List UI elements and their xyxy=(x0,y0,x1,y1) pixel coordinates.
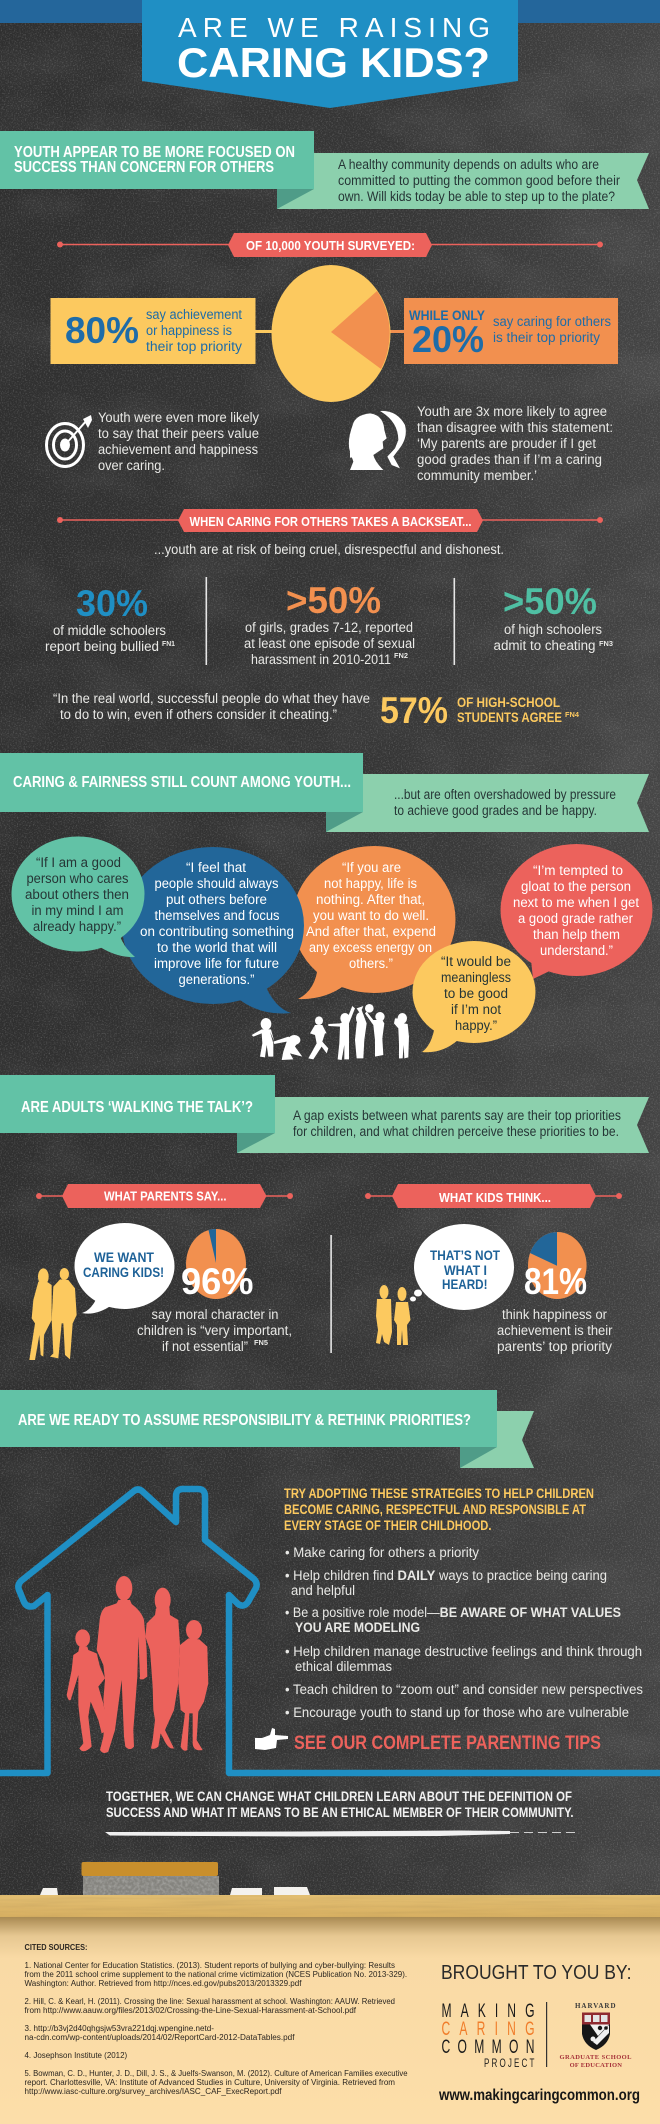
text: moral character: FN5 xyxy=(254,1340,268,1347)
pie chart: 96%: 96% xyxy=(181,1261,254,1302)
icon: parents silhouette xyxy=(29,1268,77,1360)
cited sources: report. Charlottesville, VA: Institute of Advanced Studies in Culture, University of Virginia. Retrieved from xyxy=(24,2077,395,2087)
icon: head silhouettes xyxy=(349,411,406,470)
callout: 80% xyxy=(50,298,256,364)
pie chart: 80 / 20 xyxy=(255,265,406,402)
panel: section 4 banner xyxy=(0,1075,649,1153)
text: strategies heading: BECOME CARING, RESPECTFUL AND RESPONSIBLE AT xyxy=(284,1502,587,1517)
cited sources: from http://www.aauw.org/files/2013/02/Crossing-the-Line-Sexual-Harassment-at-School.pdf xyxy=(24,2005,357,2015)
speech bubble: yellow: meaningless xyxy=(441,970,511,985)
chalk pieces xyxy=(40,1887,310,1895)
speech bubble: orange: any excess energy on xyxy=(309,940,432,955)
call to action: parenting tips: SEE OUR COMPLETE PARENTING TIPS xyxy=(294,1733,601,1754)
quote: real world xyxy=(53,691,370,722)
quote: real world: “In the real world, successful people do what they have xyxy=(53,691,370,706)
section 1 text: committed to putting the common good before their xyxy=(338,173,620,188)
speech bubble: blue: themselves and focus xyxy=(154,908,280,923)
speech bubble: orange: “If you are xyxy=(342,860,401,875)
stat: 57%: STUDENTS AGREE xyxy=(457,709,562,725)
section 3 heading: CARING & FAIRNESS STILL COUNT AMONG YOUTH... xyxy=(13,774,351,791)
section 1 heading xyxy=(14,144,295,176)
bullet list: strategies: • Help children manage destructive feelings and think through xyxy=(285,1644,642,1659)
stat: >50% girls: >50% xyxy=(286,580,381,621)
logo: making caring common: COMMON xyxy=(442,2036,535,2058)
speech bubble: that's not what I heard: HEARD! xyxy=(442,1276,488,1292)
cited sources: Washington: Author. Retrieved from http://nces.ed.gov/pubs2013/2013329.pdf xyxy=(24,1978,302,1988)
section 1 heading: SUCCESS THAN CONCERN FOR OTHERS xyxy=(14,159,274,176)
pill: what parents say: WHAT PARENTS SAY... xyxy=(104,1190,226,1204)
stat: >50% girls: at least one episode of sexual xyxy=(244,636,415,651)
speech bubble: red: gloat to the person xyxy=(521,879,631,894)
callout: 20%: is their top priority xyxy=(493,330,600,345)
speech bubble: blue xyxy=(122,847,304,1013)
panel: section 3 banner xyxy=(0,753,649,832)
bullet list: strategies: • Be a positive role model—BE AWARE OF WHAT VALUES xyxy=(285,1605,621,1620)
speech bubble: blue: generations.” xyxy=(178,972,254,987)
text: moral character: say moral character in xyxy=(152,1307,278,1322)
stat: >50% cheating: FN3 xyxy=(599,641,613,648)
stat: >50% girls: harassment in 2010-2011 xyxy=(251,652,391,667)
speech bubble: teal: person who cares xyxy=(26,871,129,886)
speech bubble: red: a good grade rather xyxy=(518,911,633,926)
section 1 text: own. Will kids today be able to step up to the plate? xyxy=(338,189,615,204)
speech bubble: yellow: to be good xyxy=(444,986,508,1001)
section 4 text: for children, and what children perceive these priorities to be. xyxy=(293,1124,619,1139)
speech bubble: blue: people should always xyxy=(154,876,279,891)
stat: 57%: 57% xyxy=(380,690,448,731)
speech bubble: blue: on contributing something xyxy=(140,924,294,939)
section 4 text xyxy=(293,1108,621,1139)
speech bubble: we want caring kids: CARING KIDS! xyxy=(83,1264,164,1280)
pill: what kids think xyxy=(365,1184,622,1208)
cited sources: 1. National Center for Education Statistics. (2013). Student reports of bullying and cyber-bullying: Results xyxy=(24,1960,395,1970)
pie chart: 81% xyxy=(524,1232,587,1302)
bullet list: strategies: • Teach children to “zoom out” and consider new perspectives xyxy=(285,1682,643,1697)
section 3 text: ...but are often overshadowed by pressure xyxy=(394,787,616,802)
stat: 30%: 30% xyxy=(76,583,148,624)
speech bubble: that's not what I heard: THAT’S NOT xyxy=(430,1247,500,1263)
callout: 80%: say achievement xyxy=(146,307,242,322)
text: parents top priority: achievement is their xyxy=(497,1323,613,1338)
speech bubble: teal: “If I am a good xyxy=(36,855,121,870)
cited sources: na-cdn.com/wp-content/uploads/2014/02/ReportCard-2012-DataTables.pdf xyxy=(24,2032,295,2042)
section 1 heading: YOUTH APPEAR TO BE MORE FOCUSED ON xyxy=(14,144,295,161)
text: strategies heading: EVERY STAGE OF THEIR CHILDHOOD. xyxy=(284,1518,492,1533)
text: parents top priority xyxy=(497,1307,613,1354)
panel: section 1 banner xyxy=(0,131,649,209)
icon: family silhouette xyxy=(67,1576,208,1753)
text: prouder: good grades than if I’m a caring xyxy=(417,452,602,467)
section 3 text xyxy=(394,787,616,818)
callout: 80%: or happiness is xyxy=(146,323,232,338)
bullet list: strategies: • Encourage youth to stand up for those who are vulnerable xyxy=(285,1705,629,1720)
speech bubble: blue: put others before xyxy=(166,892,267,907)
section 1 text: A healthy community depends on adults who are xyxy=(338,157,599,172)
header strip xyxy=(0,0,660,23)
logo: harvard graduate school of education: GRADUATE SCHOOL xyxy=(560,2054,632,2061)
speech bubble: that's not what I heard: WHAT I xyxy=(444,1262,487,1278)
logo: making caring common: MAKING xyxy=(442,2000,535,2022)
stat: >50% cheating: of high schoolers xyxy=(504,622,602,637)
stat: >50% girls: of girls, grades 7-12, reported xyxy=(245,620,413,635)
bullet list: strategies: YOU ARE MODELING xyxy=(295,1620,420,1635)
text: prouder: than disagree with this statement: xyxy=(417,420,613,435)
speech bubble: yellow: happy.” xyxy=(455,1018,497,1033)
stat: >50% girls: FN2 xyxy=(394,653,408,660)
callout: 20%: 20% xyxy=(412,319,484,360)
speech bubble: we want caring kids xyxy=(74,1223,174,1314)
speech bubble: that's not what I heard xyxy=(410,1224,514,1310)
cited sources: 3. http://b3vj2d40qhgsjw53vra221dqj.wpengine.netd- xyxy=(24,2023,214,2033)
speech bubble: red: “I’m tempted to xyxy=(533,863,623,878)
speech bubble: teal: about others then xyxy=(25,887,129,902)
brought to you by: BROUGHT TO YOU BY: xyxy=(441,1962,632,1984)
section 4 text: A gap exists between what parents say are their top priorities xyxy=(293,1108,621,1123)
section 4 heading: ARE ADULTS ‘WALKING THE TALK’? xyxy=(21,1099,253,1116)
section 3 text: to achieve good grades and be happy. xyxy=(394,803,597,818)
text: peers value: over caring. xyxy=(98,458,165,473)
speech bubble: red: understand.” xyxy=(540,943,613,958)
closing statement: TOGETHER, WE CAN CHANGE WHAT CHILDREN LEARN ABOUT THE DEFINITION OF xyxy=(106,1789,572,1804)
chalk underline xyxy=(105,1830,577,1836)
speech bubble: orange: nothing. After that, xyxy=(316,892,425,907)
cited sources: 2. Hill, C. & Kearl, H. (2011). Crossing the line: Sexual harassment at school. Washington: AAUW. Retrieved xyxy=(24,1996,395,2006)
speech bubble: orange: And after that, expend xyxy=(306,924,436,939)
pie chart: 96% xyxy=(181,1229,254,1302)
icon: target xyxy=(46,415,92,466)
stat: >50% cheating: admit to cheating xyxy=(494,638,596,653)
speech bubble: yellow xyxy=(412,941,536,1052)
text: parents top priority: think happiness or xyxy=(502,1307,607,1322)
text: prouder xyxy=(417,404,613,483)
bullet list: strategies: • Help children find DAILY ways to practice being caring xyxy=(285,1568,607,1583)
speech bubble: teal xyxy=(12,836,144,957)
title banner xyxy=(142,0,518,108)
text: moral character xyxy=(137,1307,292,1354)
panel: section 5 banner xyxy=(0,1390,534,1468)
text: youth at risk: ...youth are at risk of being cruel, disrespectful and dishonest. xyxy=(154,542,504,557)
text: prouder: community member.’ xyxy=(417,468,537,483)
logo: harvard graduate school of education: OF EDUCATION xyxy=(570,2062,622,2069)
logo: harvard graduate school of education: HARVARD xyxy=(575,2002,616,2010)
text: prouder: ‘My parents are prouder if I get xyxy=(417,436,596,451)
stat: >50% cheating xyxy=(494,581,613,653)
callout: 20%: WHILE ONLY xyxy=(409,308,485,323)
pill: when caring takes a backseat xyxy=(57,509,603,532)
callout: 80%: 80% xyxy=(65,310,139,351)
speech bubble: blue: improve life for future xyxy=(154,956,279,971)
bullet list: strategies: and helpful xyxy=(291,1583,355,1598)
icon: pointing hand xyxy=(255,1728,288,1750)
stat: 30% xyxy=(45,583,175,654)
callout: 80%: their top priority xyxy=(146,339,242,354)
cited sources: http://www.iasc-culture.org/survey_archives/IASC_CAF_ExecReport.pdf xyxy=(24,2086,282,2096)
pill: of 10,000 youth surveyed: OF 10,000 YOUTH SURVEYED: xyxy=(246,239,415,253)
icon: kids silhouette xyxy=(376,1285,410,1345)
logo: harvard graduate school of education xyxy=(560,2002,632,2069)
title line 1: ARE WE RAISING xyxy=(178,12,490,43)
cited sources: CITED SOURCES: xyxy=(24,1942,88,1952)
cited sources: from the 2011 school crime supplement to the national crime victimization (NCES Publication No. 2013-329). xyxy=(24,1969,407,1979)
cited sources xyxy=(24,1942,408,2096)
speech bubble: blue: to the world that will xyxy=(157,940,277,955)
text: peers value: to say that their peers value xyxy=(98,426,259,441)
logo: making caring common: PROJECT xyxy=(484,2058,534,2070)
wooden chalk tray xyxy=(0,1895,660,1917)
stat: 57%: FN4 xyxy=(565,712,579,719)
stat: >50% cheating: >50% xyxy=(503,581,597,622)
pill: what parents say xyxy=(36,1184,293,1208)
text: peers value: achievement and happiness xyxy=(98,442,258,457)
speech bubble: orange: others.” xyxy=(349,956,393,971)
stat: >50% girls xyxy=(244,580,415,667)
text: moral character: if not essential” xyxy=(162,1339,248,1354)
stat: 30%: FN1 xyxy=(162,641,175,648)
pill: when caring takes a backseat: WHEN CARING FOR OTHERS TAKES A BACKSEAT... xyxy=(190,515,472,529)
eraser xyxy=(82,1862,219,1895)
stat: 57%: OF HIGH-SCHOOL xyxy=(457,694,560,710)
text: peers value: Youth were even more likely xyxy=(98,410,259,425)
closing statement: SUCCESS AND WHAT IT MEANS TO BE AN ETHICAL MEMBER OF THEIR COMMUNITY. xyxy=(106,1805,574,1820)
speech bubble: orange xyxy=(292,846,456,999)
text: prouder: Youth are 3x more likely to agree xyxy=(417,404,607,419)
logo: making caring common xyxy=(442,2000,534,2070)
speech bubble: we want caring kids: WE WANT xyxy=(94,1249,154,1265)
callout: 20%: say caring for others xyxy=(493,314,611,329)
stat: 57% xyxy=(380,690,579,731)
stat: 30%: report being bullied xyxy=(45,639,159,654)
logo: making caring common: CARING xyxy=(442,2018,535,2040)
stat: 30%: of middle schoolers xyxy=(53,623,166,638)
panel: footer xyxy=(0,1917,660,2124)
speech bubble: red: next to me when I get xyxy=(513,895,639,910)
title line 2: CARING KIDS? xyxy=(177,39,490,86)
speech bubble: red xyxy=(500,844,652,979)
speech bubble: teal: already happy.” xyxy=(33,919,121,934)
icon: children playing silhouettes xyxy=(252,1004,409,1060)
bullet list: strategies: • Make caring for others a priority xyxy=(285,1545,479,1560)
pill: what kids think: WHAT KIDS THINK... xyxy=(439,1191,551,1205)
speech bubble: orange: not happy, life is xyxy=(324,876,417,891)
text: strategies heading: TRY ADOPTING THESE STRATEGIES TO HELP CHILDREN xyxy=(284,1486,594,1501)
cited sources: 5. Bowman, C. D., Hunter, J. D., Dill, J. S., & Juelfs-Swanson, M. (2012). Culture of American Families executive xyxy=(24,2068,408,2078)
section 5 heading: ARE WE READY TO ASSUME RESPONSIBILITY & RETHINK PRIORITIES? xyxy=(18,1412,471,1429)
speech bubble: teal: in my mind I am xyxy=(32,903,124,918)
closing statement xyxy=(106,1789,574,1820)
pie chart: 81%: 81% xyxy=(524,1261,587,1302)
speech bubble: yellow: if I’m not xyxy=(451,1002,501,1017)
section 1 text xyxy=(338,157,620,204)
speech bubble: red: than help them xyxy=(533,927,620,942)
callout: 20% xyxy=(404,298,618,364)
quote: real world: to do to win, even if others consider it cheating.” xyxy=(60,707,337,722)
bullet list: strategies: ethical dilemmas xyxy=(295,1659,392,1674)
bullet list: strategies xyxy=(285,1545,643,1720)
text: strategies heading xyxy=(284,1486,594,1533)
speech bubble: yellow: “It would be xyxy=(441,954,511,969)
text: moral character: children is “very important, xyxy=(137,1323,292,1338)
cited sources: 4. Josephson Institute (2012) xyxy=(24,2050,127,2060)
text: parents top priority: parents’ top priority xyxy=(497,1339,612,1354)
speech bubble: blue: “I feel that xyxy=(186,860,246,875)
icon: house outline xyxy=(0,1489,660,1773)
speech bubble: orange: you want to do well. xyxy=(313,908,429,923)
pill: of 10,000 youth surveyed xyxy=(57,233,603,257)
text: peers value xyxy=(98,410,259,473)
